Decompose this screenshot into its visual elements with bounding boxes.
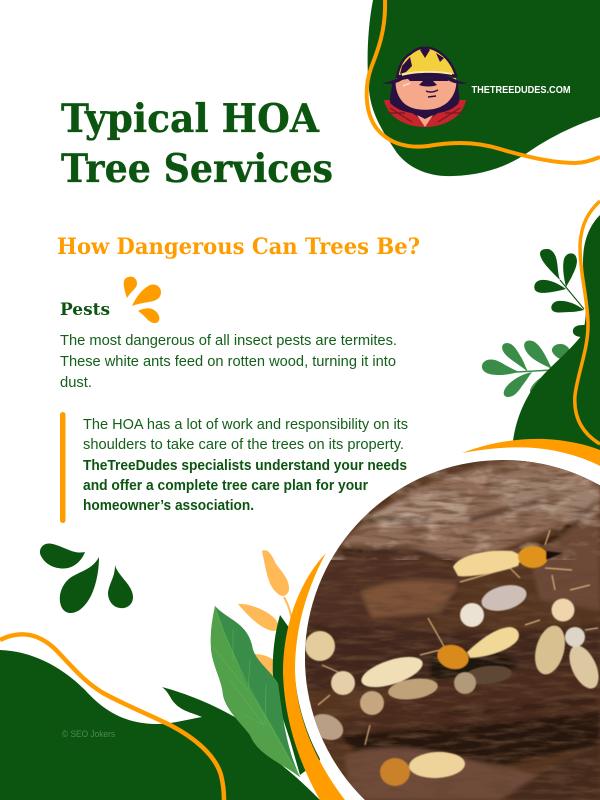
sunglasses and nose [407,78,451,86]
beard [390,82,459,122]
orange crescent beside photo [283,553,345,800]
edge termites [305,631,335,661]
right termites [534,625,566,676]
bark highlights [331,460,600,560]
callout text: homeowner’s association. [83,498,254,514]
hat band highlight [402,71,452,76]
callout text: The HOA has a lot of work and responsibility on its [83,417,408,433]
shaded termite [388,678,438,700]
pale termite left [360,656,424,688]
right orange curve [575,201,600,444]
orange head termite upper [453,551,522,576]
callout text: and offer a complete tree care plan for your [83,478,368,494]
bottom left green blob [0,650,320,800]
top right green blob [368,0,600,176]
right side dark leaves [534,249,590,337]
top right orange curve [367,0,600,163]
cheek highlight [403,83,410,86]
white ring around photo [294,449,600,800]
logo mascot [382,48,468,127]
callout bar [60,412,66,523]
site url: THETREEDUDES.COM [472,84,571,96]
orange head termite center [467,627,519,658]
right green blob [513,215,600,452]
mouth [426,90,438,97]
pests paragraph [60,333,397,391]
bark grain [300,455,600,800]
dark green back leaf [273,615,320,775]
termites [305,530,600,786]
pests paragraph: The most dangerous of all insect pests are termites. [60,333,397,349]
green leaf drops [40,543,133,613]
light orange plant [238,550,292,680]
callout text [83,417,408,514]
hard hat [397,48,456,77]
dark termite [468,665,512,684]
title: Typical HOA [61,96,320,142]
hat details [400,48,444,74]
shirt collar [417,115,433,127]
bottom left orange curve [0,634,224,800]
copyright: © SEO Jokers [62,729,115,739]
title: Tree Services [61,146,333,192]
shirt [384,100,466,127]
pests paragraph: dust. [60,375,92,391]
big green leaf [211,606,300,777]
pests heading: Pests [60,300,110,320]
pests paragraph: These white ants feed on rotten wood, turning it into [60,354,396,370]
shirt plaid [388,108,462,122]
hat brim [382,74,468,84]
callout text: TheTreeDudes specialists understand your needs [83,458,407,474]
title [61,96,333,192]
subtitle: How Dangerous Can Trees Be? [57,234,420,260]
legs and antennae [318,530,598,745]
icon: orange drops [124,277,161,323]
callout text: shoulders to take care of the trees on its property. [83,437,404,453]
bark tones [305,454,600,800]
face [396,78,456,110]
orange swoosh above photo [462,439,600,466]
termite photo [300,454,600,800]
right side light leaves [482,341,570,397]
white termite [480,584,528,612]
bottom termite [408,751,466,779]
bark base [300,455,600,800]
